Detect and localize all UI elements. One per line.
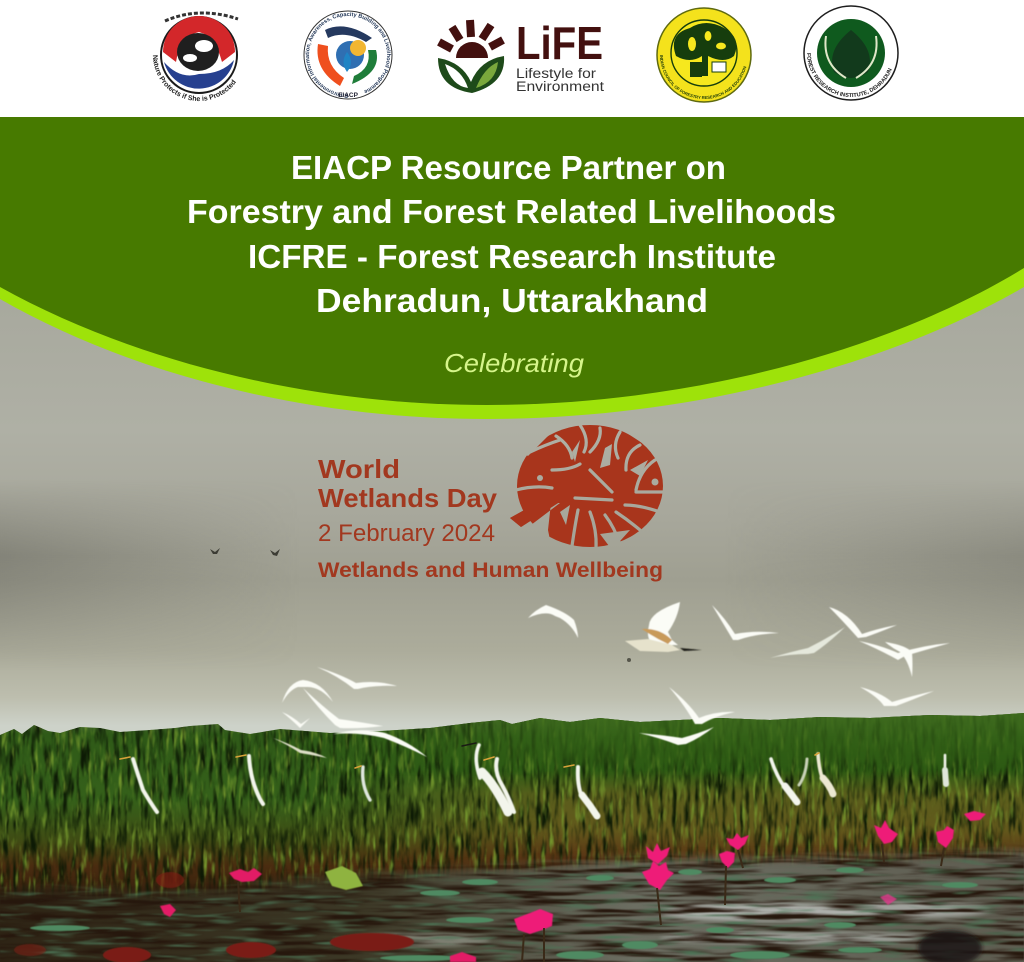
logo: ICFRE: INDIAN COUNCIL OF FORESTRY RESEARCH AND EDUCATION <box>660 55 746 99</box>
cattle egret <box>625 629 702 652</box>
event text: World <box>318 454 400 484</box>
grass field <box>0 710 1024 910</box>
banner title: ICFRE - Forest Research Institute <box>248 238 776 275</box>
event text: Wetlands Day <box>318 483 498 513</box>
distant birds <box>210 548 631 662</box>
logo: Forest Research Institute <box>803 5 899 101</box>
logo: nature protects <box>152 12 238 102</box>
header logo strip <box>0 0 1024 118</box>
logo: LiFE <box>438 17 604 94</box>
logo: LiFE: LiFE <box>516 17 603 69</box>
World Wetlands Day logo <box>318 415 675 582</box>
standing egrets <box>133 745 946 816</box>
banner title <box>187 149 836 319</box>
banner title: Forestry and Forest Related Livelihoods <box>187 193 836 230</box>
green title banner <box>0 117 1024 419</box>
flying egrets <box>273 602 950 758</box>
water with lily pads <box>0 840 1024 962</box>
lily pad highlight <box>325 866 363 890</box>
logo: LiFE: Environment <box>516 79 604 94</box>
logo: LiFE: Lifestyle for <box>516 66 597 81</box>
logo: ICFRE <box>656 7 752 103</box>
wetlands emblem <box>510 425 663 547</box>
banner title: Dehradun, Uttarakhand <box>316 282 708 319</box>
lotus flowers <box>160 811 986 962</box>
event text <box>318 454 663 582</box>
banner title: EIACP Resource Partner on <box>291 149 726 186</box>
egret beaks <box>120 743 819 768</box>
logo: EIACP: EIACP <box>338 92 359 99</box>
photo background: wetland <box>0 270 1024 962</box>
event text: Wetlands and Human Wellbeing <box>318 559 663 582</box>
lime border <box>0 266 1024 419</box>
logo: EIACP: Environmental Information, Awareness, Capacity Building and Livelihood Programme <box>305 12 392 98</box>
lotus stems <box>238 844 944 962</box>
celebrating label: Celebrating <box>444 348 585 378</box>
logo: Forest Research Institute: FOREST RESEARCH INSTITUTE, DEHRADUN <box>807 53 892 97</box>
sky <box>0 270 1024 740</box>
LiFE sun mark <box>438 20 504 93</box>
event text: 2 February 2024 <box>318 520 495 547</box>
banner fill <box>0 117 1024 405</box>
red water plants <box>14 872 414 962</box>
logo: nature protects: Nature Protects if She is Protected <box>152 55 236 102</box>
